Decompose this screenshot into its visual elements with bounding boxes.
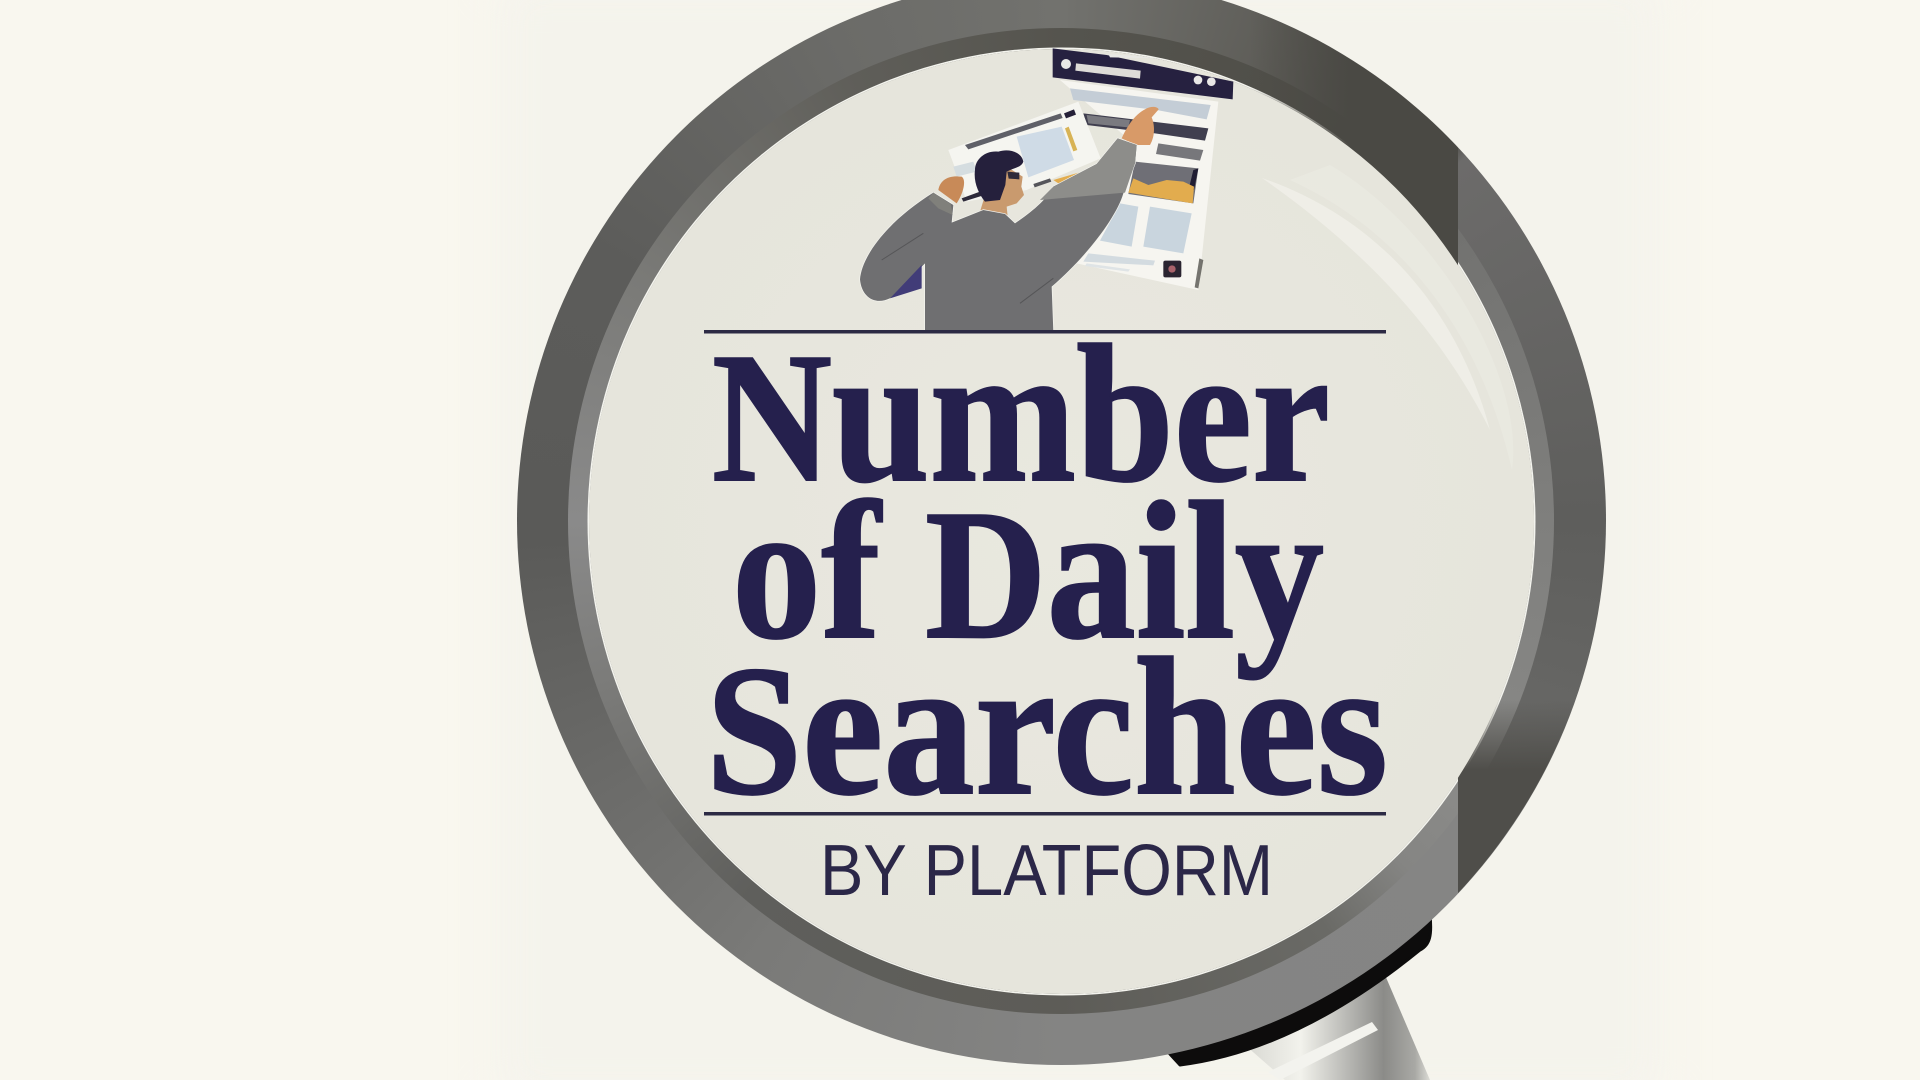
- magnifier lens: [589, 49, 1534, 994]
- lens glare: [1262, 165, 1513, 470]
- ring facets and lens glare: [1255, 30, 1566, 893]
- title line: Searches: Searches: [706, 617, 1388, 836]
- man: grey jacket: [860, 138, 1137, 332]
- browser title bar: [1053, 48, 1233, 99]
- top rule: [704, 330, 1386, 334]
- paper tone behind magnifier: [500, 0, 1660, 1080]
- page background: [517, 0, 1606, 1080]
- magnifier inner bevel ring: [568, 28, 1554, 1014]
- ring facet: upper right dark: [1255, 30, 1458, 266]
- left document page: [948, 102, 1101, 202]
- magnifier outer ring: [517, 0, 1606, 1065]
- man: head and neck: [975, 150, 1024, 223]
- ring facet: lower right dark: [1458, 704, 1566, 893]
- man: pointing hand: [1122, 107, 1159, 145]
- title line: Number: Number: [712, 304, 1330, 523]
- subtitle: BY PLATFORM: [820, 831, 1273, 911]
- bottom rule: [704, 812, 1386, 816]
- icon: small page button: [1163, 261, 1181, 277]
- right document page: [1060, 80, 1218, 290]
- title line: of Daily: of Daily: [732, 461, 1324, 680]
- man: left hand: [938, 176, 964, 203]
